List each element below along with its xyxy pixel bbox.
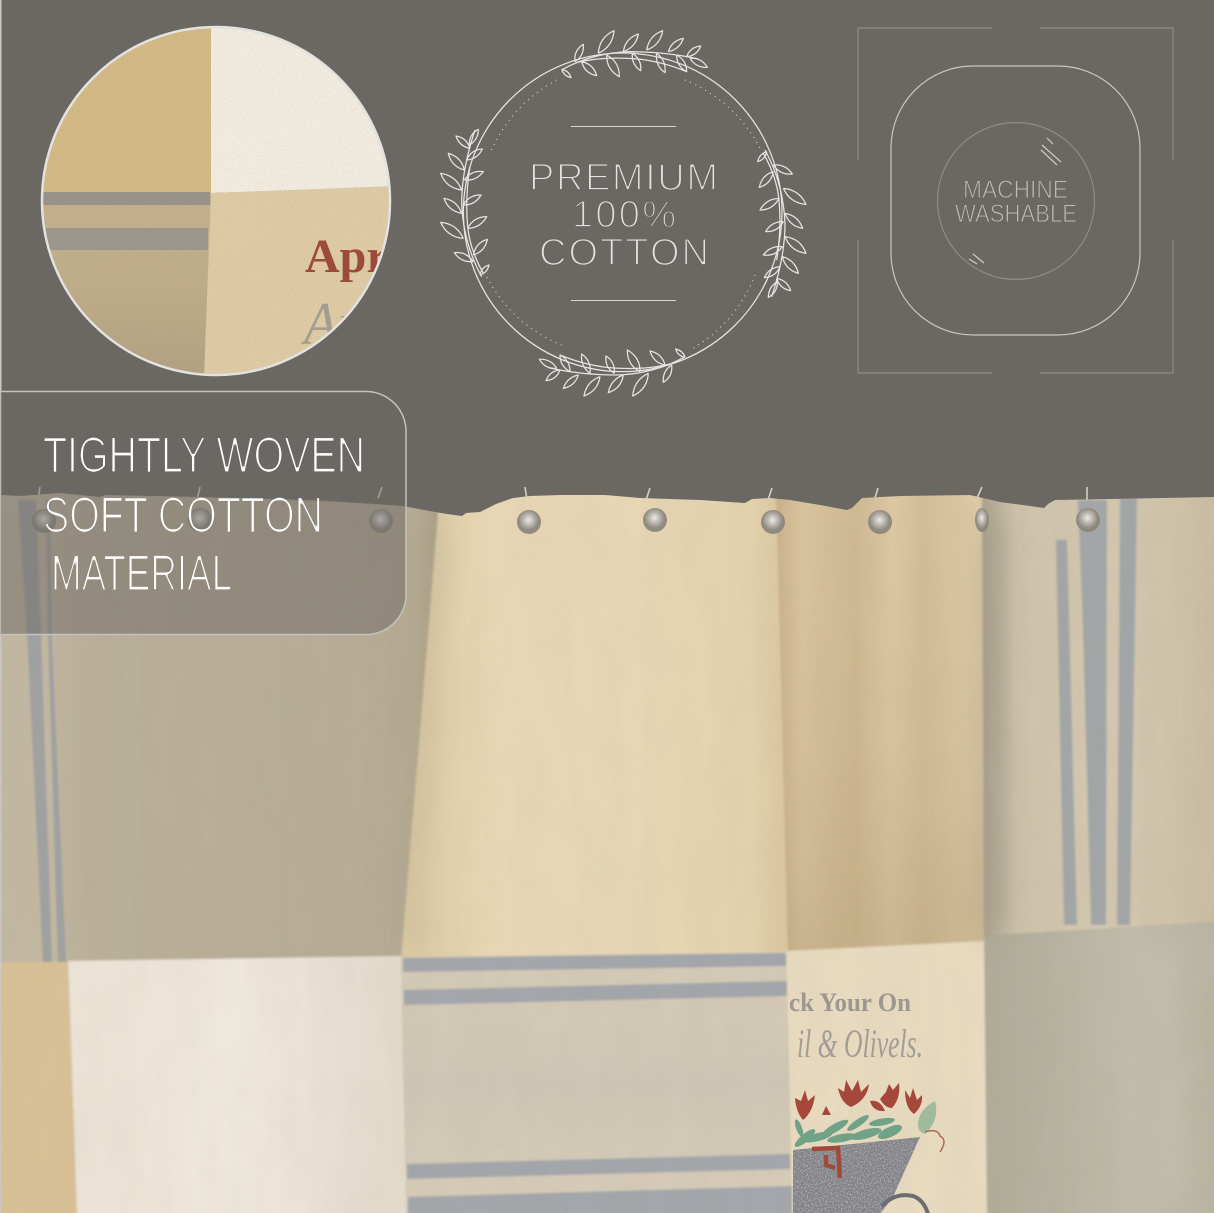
- translucent callout panel: [0, 392, 406, 634]
- washable text: MACHINE: [963, 176, 1068, 204]
- woven grey stripes: [40, 192, 210, 205]
- lower left tan panel: [0, 962, 77, 1213]
- lower middle striped panel: [401, 952, 792, 1213]
- rounded washer outline: [891, 66, 1140, 335]
- callout text: SOFT COTTON: [43, 487, 323, 543]
- dotted ring segments: [487, 78, 760, 350]
- fabric mottling texture: [0, 490, 1214, 1213]
- greige upper left panel: [48, 490, 442, 966]
- corner frame: [858, 28, 1173, 373]
- washable text: [955, 176, 1077, 228]
- bottom branch: [539, 349, 685, 396]
- printed lettering on fabric: ck Your On: [789, 988, 912, 1017]
- upper right panel lower shading: [788, 776, 984, 950]
- upper divider line: [571, 126, 676, 127]
- printed flower basket: [792, 1080, 944, 1213]
- callout text: TIGHTLY WOVEN: [43, 427, 365, 483]
- shower curtain hooks: [38, 487, 1087, 500]
- left image edge line: [0, 0, 2, 1213]
- callout text: [43, 427, 365, 601]
- top branch: [562, 31, 707, 78]
- badge text: [529, 157, 718, 274]
- callout text: MATERIAL: [51, 545, 232, 601]
- lower divider line: [571, 300, 676, 301]
- laurel wreath: [441, 31, 806, 396]
- badge text: PREMIUM: [529, 157, 718, 199]
- grey script text: Ar: [300, 291, 360, 357]
- woven texture: [40, 25, 392, 377]
- badge text: COTTON: [539, 232, 709, 274]
- upper middle cream-tan panel: [401, 490, 790, 960]
- badge text: 100%: [572, 194, 676, 236]
- lower cream printed panel: [786, 941, 988, 1213]
- machine washable badge: [858, 28, 1173, 373]
- left branch: [441, 129, 489, 277]
- far right vertical blue stripes: [1056, 498, 1137, 925]
- red print text: Apr: [305, 230, 388, 283]
- thin ring: [463, 53, 782, 372]
- left vertical blue stripes: [18, 500, 66, 962]
- fabric close-up circle: [40, 25, 395, 378]
- door glints: [969, 138, 1061, 264]
- washable text: WASHABLE: [955, 200, 1077, 228]
- wreath badge: premium cotton: [441, 31, 806, 396]
- printed lettering on fabric: [789, 988, 944, 1213]
- upper right tan panel: [776, 490, 985, 952]
- left edge fabric strip: [2, 494, 63, 964]
- right branch: [758, 150, 806, 297]
- washer door circle: [938, 122, 1094, 280]
- fabric fold shadows: [411, 531, 1008, 921]
- curtain photograph: [0, 490, 1214, 1213]
- far right striped panel: [982, 490, 1214, 936]
- printed lettering on fabric: il & Olivels.: [797, 1021, 923, 1066]
- lower right grey-green panel: [984, 922, 1214, 1213]
- lower white panel: [68, 956, 407, 1213]
- shower curtain rings: [32, 508, 1100, 534]
- horizontal blue stripes: [403, 953, 792, 1213]
